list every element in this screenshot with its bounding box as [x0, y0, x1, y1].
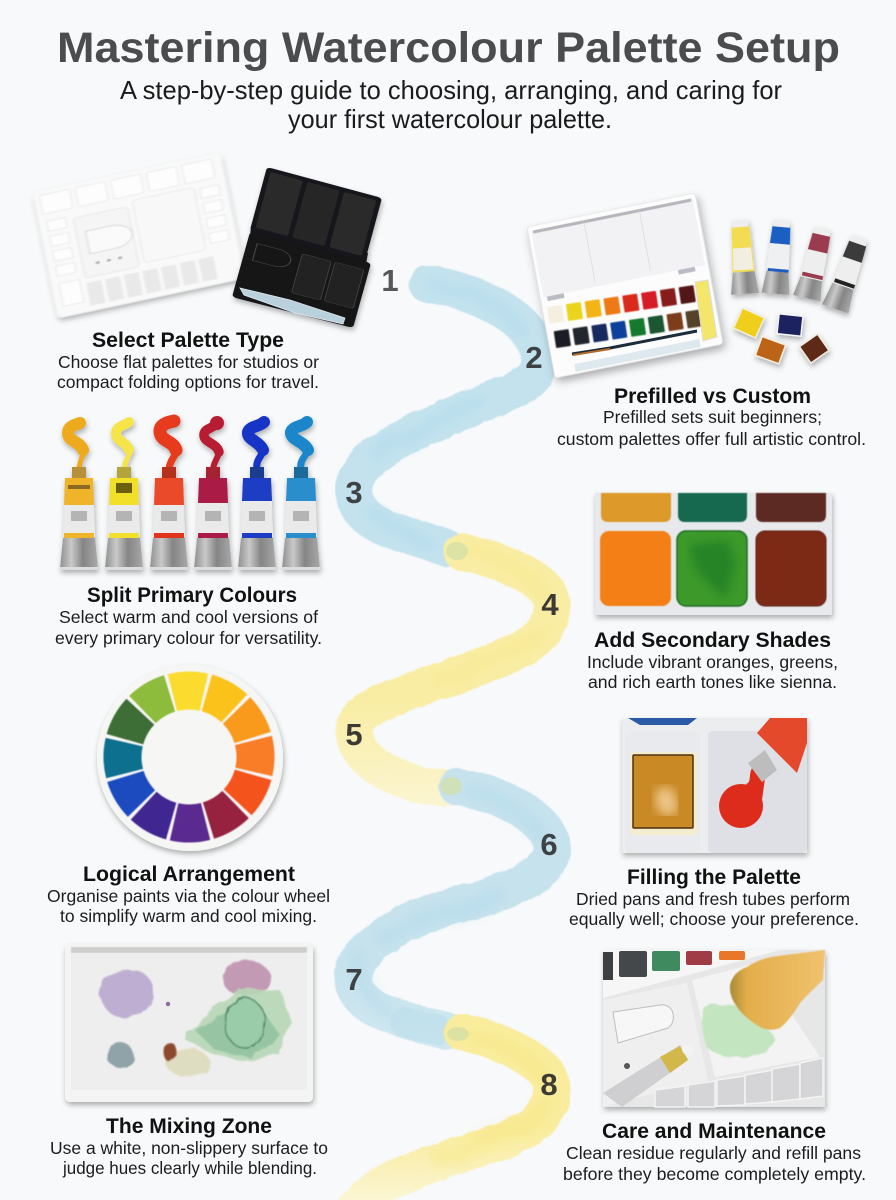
blue stroke segment 1 — [354, 284, 539, 548]
step numbers: 4 — [541, 587, 559, 622]
tube and paint — [719, 718, 807, 828]
icon: black folding tin — [232, 167, 382, 328]
earth wash — [165, 1048, 209, 1076]
description: judge hues clearly while blending. — [62, 1158, 317, 1178]
heading: Add Secondary Shades — [594, 629, 831, 652]
subtitle — [120, 75, 782, 134]
description — [50, 1138, 328, 1178]
description — [587, 652, 838, 692]
step numbers: 5 — [345, 717, 363, 752]
small tube — [603, 1043, 694, 1107]
description: Use a white, non-slippery surface to — [50, 1138, 328, 1158]
description — [569, 889, 859, 929]
heading: Logical Arrangement — [83, 863, 295, 886]
blue stroke segment 2 — [353, 787, 552, 1031]
heading: Care and Maintenance — [602, 1120, 826, 1143]
description: compact folding options for travel. — [57, 372, 319, 392]
heading: Filling the Palette — [627, 866, 801, 889]
description: Include vibrant oranges, greens, — [587, 652, 838, 672]
step numbers: 6 — [540, 827, 558, 862]
description: before they become completely empty. — [563, 1164, 866, 1184]
panel: step 4 add secondary shades — [587, 493, 838, 692]
image: secondary colour wells — [595, 493, 832, 615]
subtitle: your first watercolour palette. — [288, 104, 612, 134]
icon: water brush — [240, 288, 345, 324]
grey wash — [107, 1042, 133, 1068]
description — [563, 1143, 866, 1184]
sponge strip — [695, 280, 717, 341]
title: Mastering Watercolour Palette Setup — [57, 24, 840, 72]
panel: step 2 prefilled vs custom — [527, 193, 873, 449]
heading: The Mixing Zone — [106, 1115, 272, 1138]
description — [57, 352, 319, 392]
paint pans — [547, 285, 703, 349]
description: Choose flat palettes for studios or — [58, 352, 319, 372]
description: Select warm and cool versions of — [59, 607, 318, 627]
description: and rich earth tones like sienna. — [588, 672, 837, 692]
description: to simplify warm and cool mixing. — [60, 906, 317, 926]
description — [47, 886, 330, 926]
icon: prefilled pan set — [527, 193, 723, 378]
panel: step 8 care and maintenance — [563, 950, 866, 1184]
step numbers — [345, 263, 559, 1102]
purple wash — [100, 968, 154, 1018]
step numbers: 7 — [345, 962, 363, 997]
icon: white flat palette — [33, 153, 245, 318]
yellow stroke segment 2 — [355, 1032, 552, 1200]
icon: six tubes with paint squiggles — [60, 416, 320, 570]
step numbers: 2 — [525, 340, 543, 375]
description: equally well; choose your preference. — [569, 909, 859, 929]
tube — [194, 416, 232, 570]
brush — [572, 331, 697, 354]
heading: Prefilled vs Custom — [614, 385, 811, 408]
step numbers: 3 — [345, 475, 363, 510]
tube — [238, 422, 276, 570]
description: Dried pans and fresh tubes perform — [576, 889, 850, 909]
tube — [150, 421, 188, 570]
description: Prefilled sets suit beginners; — [603, 407, 822, 427]
subtitle: A step-by-step guide to choosing, arranging, and caring for — [120, 75, 782, 105]
tube — [60, 423, 98, 570]
description: custom palettes offer full artistic control. — [557, 429, 866, 449]
heading: Select Palette Type — [92, 329, 284, 352]
panel: step 5 logical arrangement — [47, 663, 330, 926]
sponge — [730, 950, 825, 1030]
panel: step 6 filling the palette — [569, 718, 859, 929]
watercolour river path — [353, 284, 552, 1200]
icon: colour wheel — [95, 663, 283, 851]
tube — [105, 422, 143, 570]
icon: paint tubes — [726, 219, 873, 313]
junction overlaps — [440, 542, 469, 1041]
yellow stroke segment 1 — [354, 552, 552, 788]
image: pan and fresh tube — [622, 718, 807, 853]
tube — [282, 422, 320, 570]
image: cleaning the palette — [603, 950, 825, 1107]
panel: step 3 split primary colours — [55, 416, 322, 648]
panel: step 7 the mixing zone — [50, 944, 328, 1178]
description: Clean residue regularly and refill pans — [566, 1143, 861, 1163]
heading: Split Primary Colours — [87, 584, 297, 607]
green washes — [185, 990, 290, 1062]
panel: step 1 select palette type — [33, 153, 382, 392]
step numbers: 1 — [381, 263, 399, 298]
description — [557, 407, 866, 449]
description: every primary colour for versatility. — [55, 628, 322, 648]
step numbers: 8 — [540, 1067, 558, 1102]
image: mixing tray with washes — [65, 944, 313, 1102]
pink wash — [222, 960, 270, 996]
icon: loose pans — [734, 308, 829, 364]
description: Organise paints via the colour wheel — [47, 886, 330, 906]
description — [55, 607, 322, 648]
